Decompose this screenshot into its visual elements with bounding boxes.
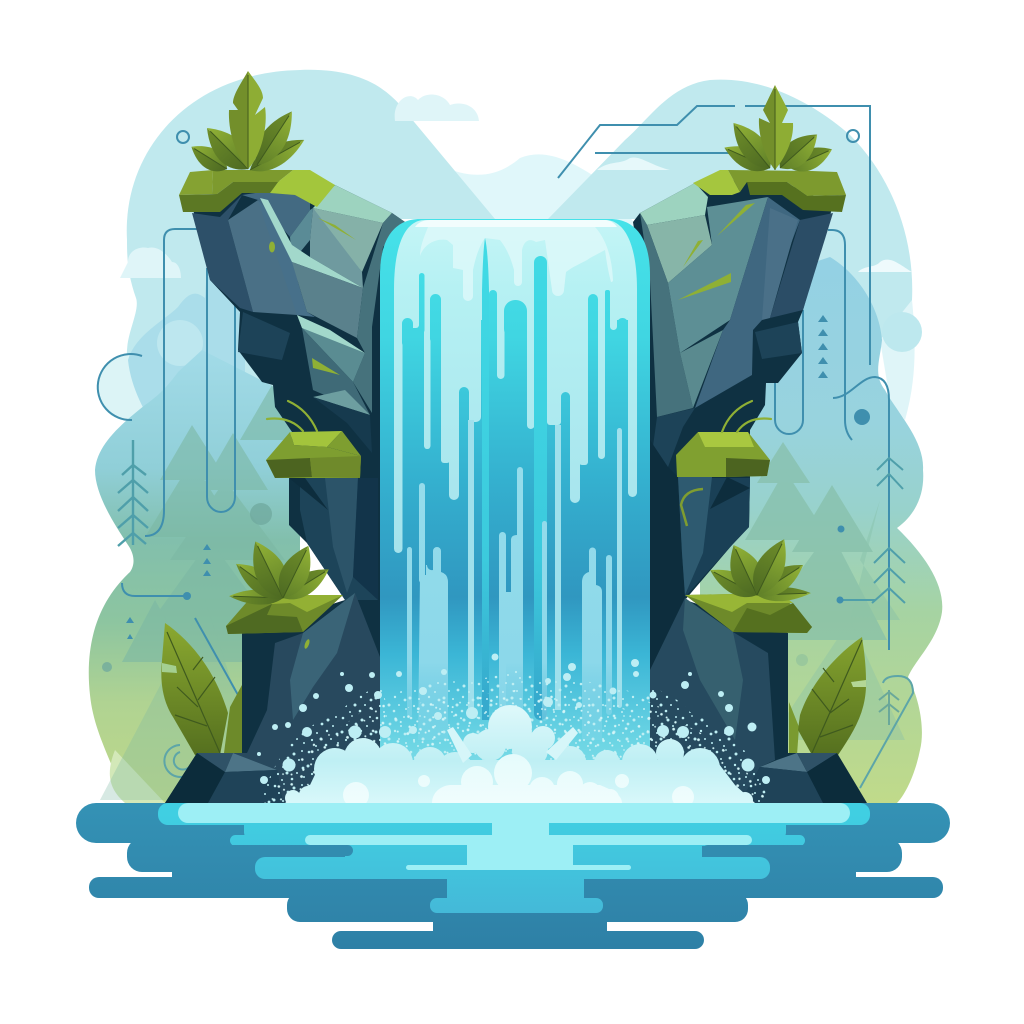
thin pale streaks [468, 420, 622, 710]
moss ledge: top left [179, 170, 335, 212]
dark pills over cyan [200, 845, 832, 857]
spray bubbles [257, 654, 770, 784]
right bottom mini tree [879, 690, 899, 725]
right curved stem [833, 377, 889, 650]
top right light blue hill [548, 80, 912, 420]
cyan water bands [158, 803, 870, 913]
left diagonal line [195, 618, 238, 695]
leaf notch [851, 680, 866, 687]
right cliff [633, 180, 867, 803]
left hook line with node [122, 583, 187, 596]
background hills and forest [89, 70, 942, 803]
foam at the base [285, 705, 755, 809]
veins [812, 640, 862, 753]
moss slivers [269, 218, 356, 649]
top right circuit line [558, 106, 870, 365]
left light blue mountain [128, 267, 245, 420]
dark water bands [76, 803, 950, 949]
upper facets [640, 183, 833, 468]
right forest blob [700, 257, 942, 803]
moss ledge: lower right [685, 593, 812, 633]
left pale base [110, 750, 165, 803]
upper right line [595, 152, 735, 154]
white cut lines [120, 872, 906, 931]
left forest blob [89, 350, 300, 803]
blue fingers rising into crest [402, 273, 628, 432]
plant: top right [720, 85, 836, 178]
center leaf [759, 85, 775, 170]
foam spikes [447, 727, 578, 763]
curled moss stem [681, 489, 703, 526]
center leaf [229, 71, 248, 169]
right U loop [775, 310, 803, 434]
clouds [120, 95, 912, 278]
decorative circuit lines [98, 106, 913, 788]
back foam [285, 705, 755, 809]
big left leaf [161, 623, 242, 755]
moss ledge: mid left [266, 431, 361, 478]
left pale disc behind arc [97, 355, 163, 421]
leaf notch [162, 663, 177, 673]
pale drip columns [394, 290, 637, 553]
lower pale streaks [407, 467, 612, 740]
small nodes and arrows [126, 315, 870, 639]
dots in the forest [102, 503, 808, 672]
light water bands [178, 803, 850, 870]
bright stripes [482, 238, 547, 720]
left cliff [165, 180, 405, 803]
right node line [840, 599, 875, 601]
moss ledge: lower left [226, 595, 343, 634]
right trees [745, 442, 905, 740]
top glow [415, 220, 617, 227]
mid and lower facets [650, 440, 867, 803]
plant: lower right [705, 533, 811, 604]
plant: lower left [229, 535, 334, 607]
moss slivers [678, 203, 755, 300]
left open arc [98, 354, 142, 420]
pale crest area [394, 220, 637, 320]
big right leaf [789, 637, 866, 755]
right bottom hook [860, 676, 913, 788]
veins [167, 632, 220, 753]
water base with cyan edge [380, 219, 650, 800]
front foam [343, 754, 694, 808]
silhouette [633, 180, 865, 803]
white crest with drips [420, 222, 613, 301]
left ring [177, 131, 189, 143]
left long rounded line [145, 229, 200, 536]
left trees [100, 385, 300, 800]
silhouette [165, 180, 405, 803]
spray speckle [262, 670, 768, 803]
left pale sun [157, 320, 203, 366]
left spiral [164, 745, 192, 777]
left tree line icon [118, 440, 148, 546]
green curled sprouts [267, 401, 771, 432]
upper facets [192, 185, 405, 453]
pale sky glow behind falls [420, 154, 640, 230]
waterfall [380, 219, 650, 800]
right pale circle [882, 312, 922, 352]
left U loop [207, 268, 235, 512]
river at the base [76, 803, 950, 949]
top left light blue hill [127, 70, 495, 420]
right pale sky patch [880, 300, 915, 420]
mid and lower facets [165, 478, 380, 803]
moss ledge: top right [693, 170, 846, 212]
right chevrons [872, 458, 905, 603]
right long rounded line [828, 230, 852, 440]
right ring [847, 130, 859, 142]
plant: top left [186, 71, 309, 179]
moss ledge: mid right [676, 432, 770, 477]
